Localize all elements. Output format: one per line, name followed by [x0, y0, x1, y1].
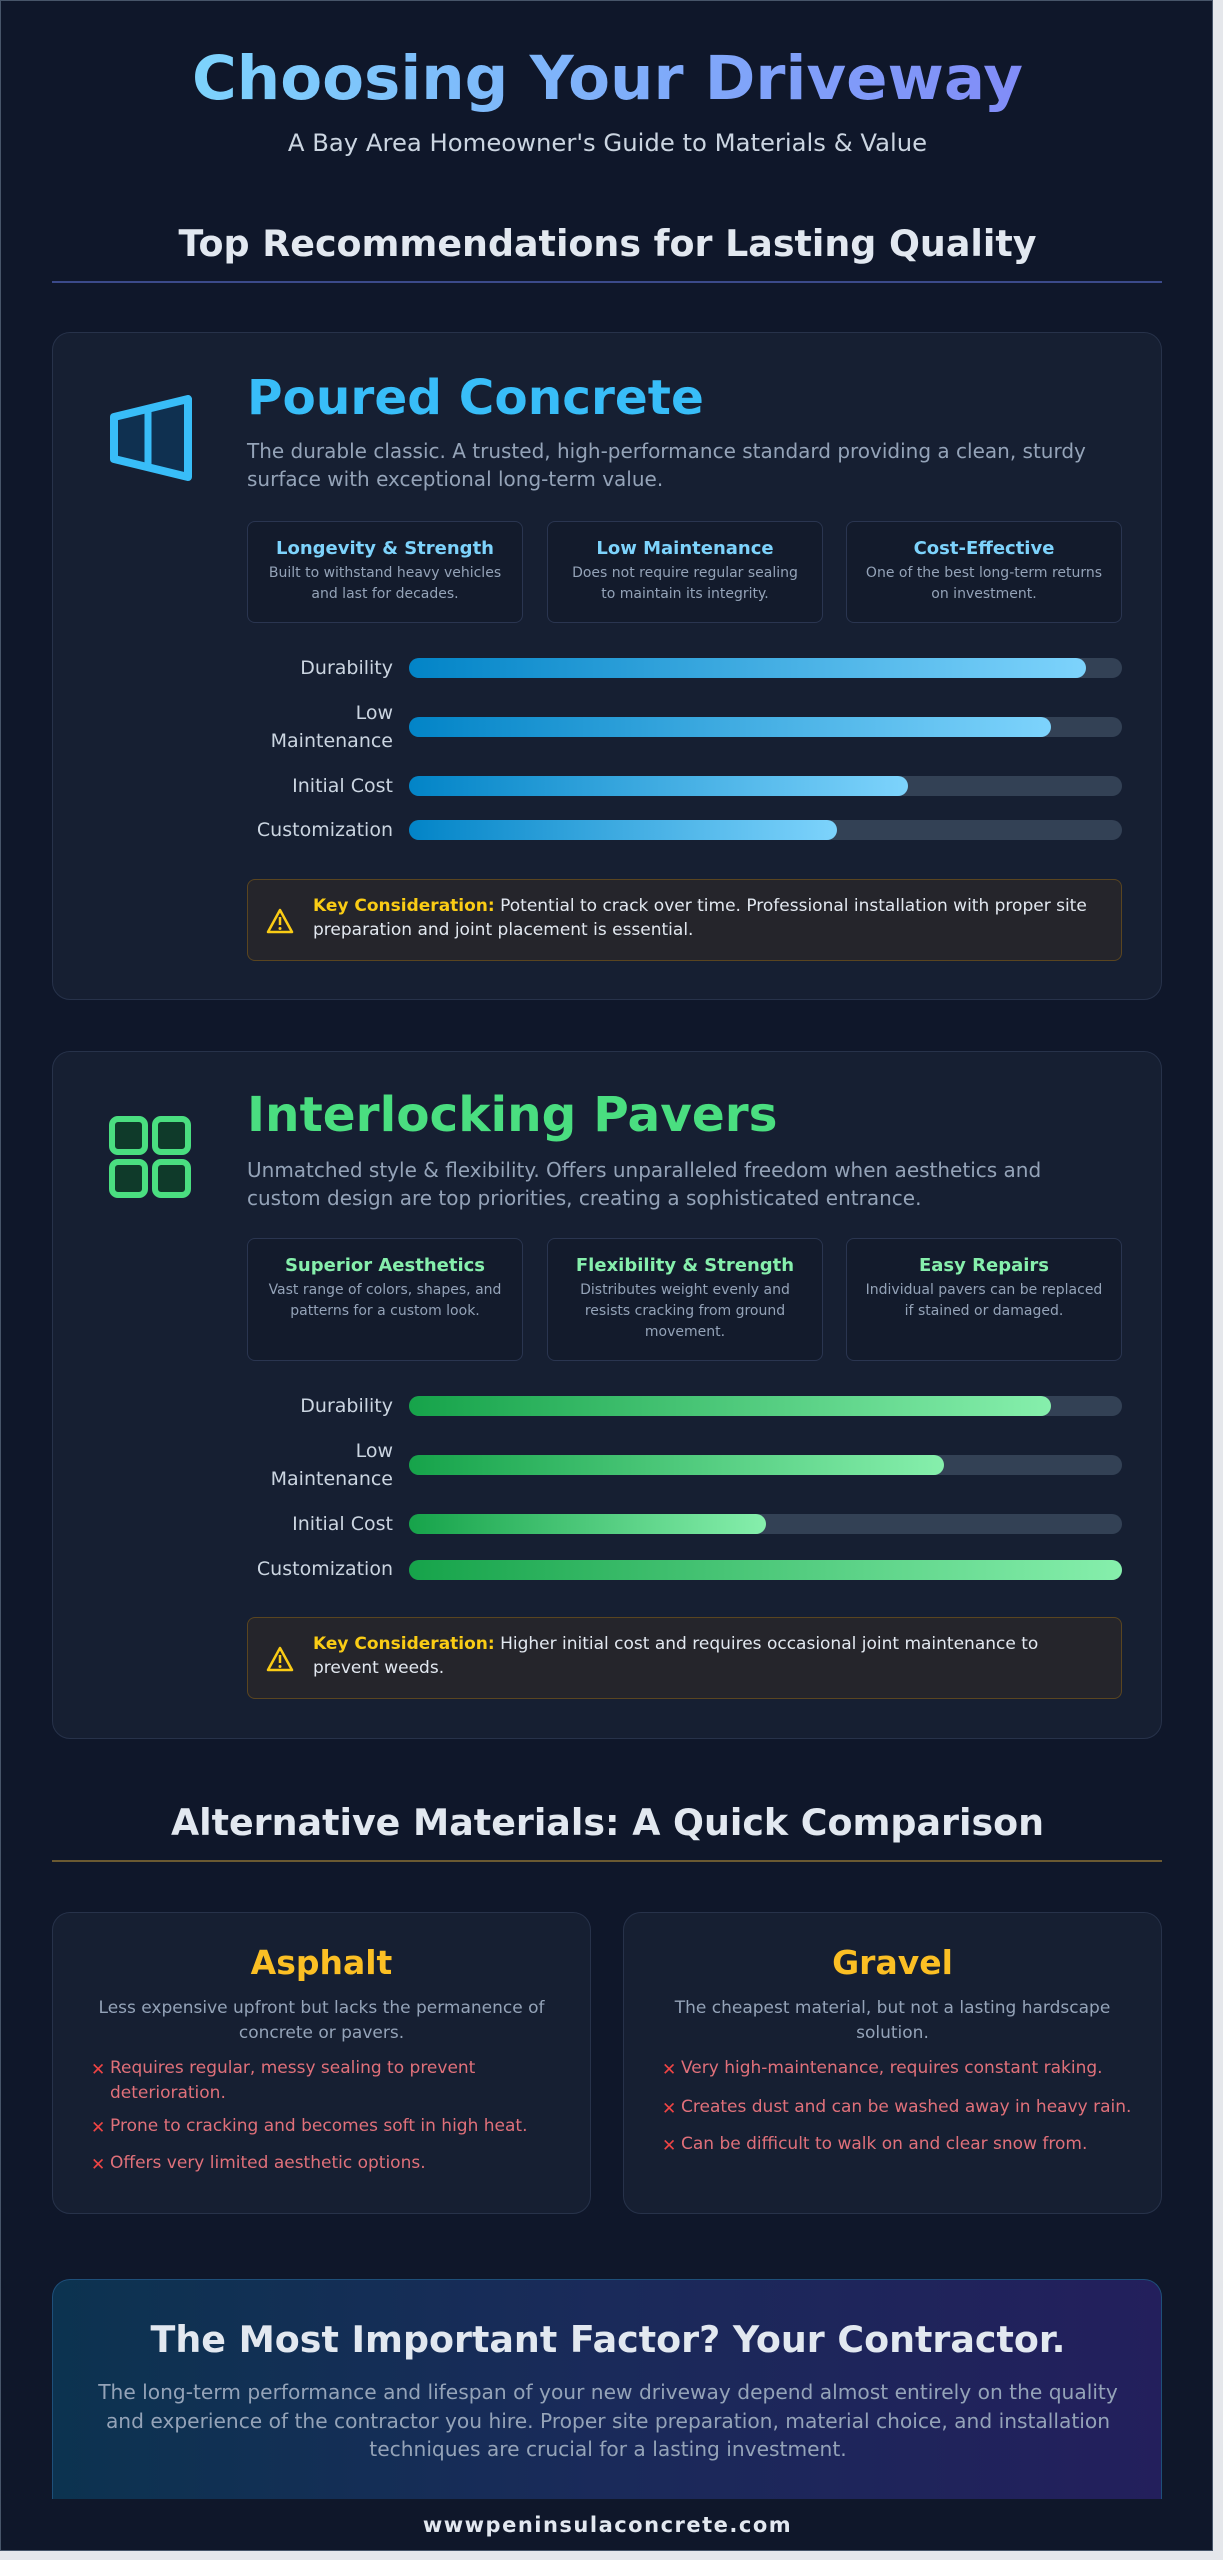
feature: longevity: [247, 521, 523, 623]
panel: contractor callout: [52, 2279, 1162, 2499]
panel: gravel: Gravel: [832, 1943, 953, 1982]
panel: asphalt: ✕: [91, 2118, 105, 2138]
subtitle: A Bay Area Homeowner's Guide to Materials & Value: [288, 128, 927, 157]
feature: aesthetics: Vast range of colors, shapes, and: [269, 1282, 501, 1298]
panel: asphalt: Asphalt: [251, 1943, 392, 1982]
feature: easy repairs: if stained or damaged.: [905, 1303, 1063, 1319]
feature: easy repairs: Individual pavers can be replaced: [866, 1282, 1102, 1298]
callout: key consideration: Key Consideration: Potential to crack over time. Professional installation with proper site preparation and joint placement is essential.: [313, 896, 1087, 940]
feature: low maintenance: Low Maintenance: [596, 538, 774, 559]
feature: low maintenance: Does not require regular sealing: [572, 565, 798, 581]
bar chart: pavers ratings: Initial Cost: [292, 1513, 393, 1535]
panel: asphalt: Less expensive upfront but lacks the permanence of concrete or pavers.: [99, 1998, 544, 2043]
bar chart: concrete ratings: Customization: [257, 819, 393, 841]
feature: cost effective: Cost-Effective: [914, 538, 1054, 559]
feature: cost effective: [846, 521, 1122, 623]
feature: cost effective: on investment.: [931, 586, 1037, 602]
panel: interlocking pavers: [52, 1051, 1162, 1739]
panel: asphalt: Requires regular, messy sealing to prevent deterioration.: [110, 2058, 475, 2103]
panel: gravel: ✕: [662, 2099, 676, 2119]
bar chart: pavers ratings: Customization: [257, 1558, 393, 1580]
feature: easy repairs: Easy Repairs: [919, 1255, 1049, 1276]
feature: cost effective: One of the best long-term returns: [866, 565, 1102, 581]
section heading: alternatives: Alternative Materials: A Quick Comparison: [171, 1801, 1044, 1844]
callout: key consideration: [247, 879, 1122, 961]
panel: gravel: Very high-maintenance, requires constant raking.: [681, 2058, 1103, 2078]
panel: gravel: The cheapest material, but not a lasting hardscape solution.: [675, 1998, 1110, 2043]
feature: flexibility: Distributes weight evenly and: [580, 1282, 790, 1298]
title: Choosing Your Driveway: [192, 43, 1023, 114]
panel: gravel: Creates dust and can be washed away in heavy rain.: [681, 2097, 1131, 2117]
panel: asphalt: Prone to cracking and becomes soft in high heat.: [110, 2116, 527, 2136]
feature: aesthetics: [247, 1238, 523, 1361]
panel: poured concrete: [52, 332, 1162, 1000]
bar chart: pavers ratings: Durability: [300, 1395, 393, 1417]
panel: asphalt: [52, 1912, 591, 2214]
panel: asphalt: ✕: [91, 2155, 105, 2175]
feature: longevity: and last for decades.: [311, 586, 459, 602]
bar chart: concrete ratings: Initial Cost: [292, 775, 393, 797]
feature: aesthetics: Superior Aesthetics: [285, 1255, 485, 1276]
feature: flexibility: [547, 1238, 823, 1361]
bar chart: concrete ratings: Low Maintenance: [271, 702, 393, 752]
feature: flexibility: resists cracking from ground: [585, 1303, 785, 1319]
bar chart: concrete ratings: [257, 657, 1122, 841]
text block: The long-term performance and lifespan of your new driveway depend almost entirely on the quality and experience of the contractor you hire. Proper site preparation, material choice, and installation techniques are crucial for a lasting investment.: [98, 2380, 1118, 2461]
panel: gravel: ✕: [662, 2060, 676, 2080]
icon: pavers grid: [109, 1116, 191, 1198]
heading: poured concrete: Poured Concrete: [247, 370, 704, 426]
bar chart: pavers ratings: Low Maintenance: [271, 1440, 393, 1490]
panel: asphalt: ✕: [91, 2060, 105, 2080]
panel: gravel: Can be difficult to walk on and clear snow from.: [681, 2134, 1087, 2154]
heading: interlocking pavers: Interlocking Pavers: [247, 1087, 778, 1143]
panel: gravel: [623, 1912, 1162, 2214]
section heading: top recommendations: Top Recommendations for Lasting Quality: [179, 222, 1036, 265]
feature: low maintenance: [547, 521, 823, 623]
feature: flexibility: Flexibility & Strength: [576, 1255, 794, 1276]
feature: longevity: Longevity & Strength: [276, 538, 494, 559]
icon: concrete slab: [110, 395, 192, 481]
description: The durable classic. A trusted, high-performance standard providing a clean, sturdy surface with exceptional long-term value.: [247, 439, 1086, 491]
bar chart: pavers ratings: [257, 1395, 1122, 1580]
callout: key consideration: [247, 1617, 1122, 1699]
panel: gravel: ✕: [662, 2136, 676, 2156]
panel: asphalt: Offers very limited aesthetic options.: [110, 2153, 426, 2173]
footer: wwwpeninsulaconcrete.com: [423, 2513, 792, 2537]
feature: flexibility: movement.: [645, 1324, 725, 1340]
description: Unmatched style & flexibility. Offers unparalleled freedom when aesthetics and custom design are top priorities, creating a sophisticated entrance.: [247, 1158, 1041, 1210]
feature: aesthetics: patterns for a custom look.: [290, 1303, 480, 1319]
callout: key consideration: Key Consideration: Higher initial cost and requires occasional joint maintenance to prevent weeds.: [313, 1634, 1038, 1678]
feature: low maintenance: to maintain its integrity.: [601, 586, 769, 602]
feature: easy repairs: [846, 1238, 1122, 1361]
heading: The Most Important Factor? Your Contractor.: [150, 2318, 1065, 2361]
bar chart: concrete ratings: Durability: [300, 657, 393, 679]
feature: longevity: Built to withstand heavy vehicles: [269, 565, 501, 581]
